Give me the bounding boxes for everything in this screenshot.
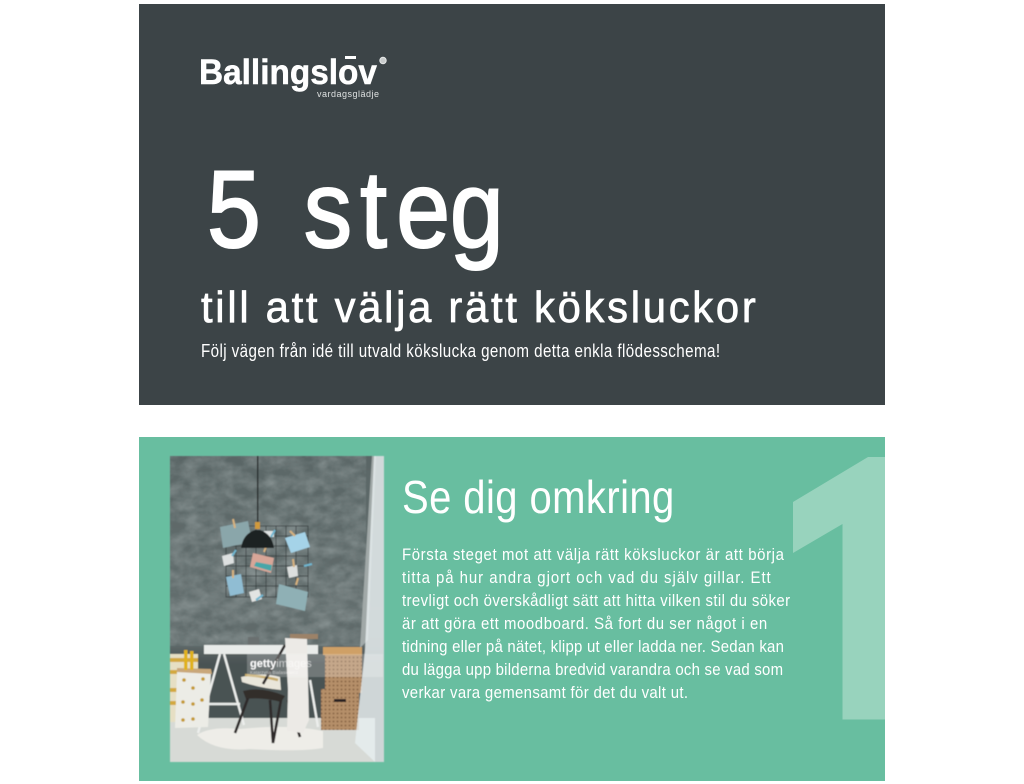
storage bags [170, 650, 212, 728]
watermark band [247, 654, 383, 677]
panel: step 1 [139, 437, 885, 781]
body text [402, 546, 791, 702]
body text: titta på hur andra gjort och vad du själv gillar. Ett [402, 568, 771, 587]
throw blanket [285, 638, 309, 733]
body text: trevligt och överskådligt sätt att hitta vilken stil du söker [402, 591, 791, 610]
watermark band: gettyimages [250, 658, 312, 670]
body text: du lägga upp bilderna bredvid varandra och se vad som [402, 661, 783, 679]
curtain [355, 456, 384, 762]
intro text: Följ vägen från idé till utvald kökslucka genom detta enkla flödesschema! [201, 341, 720, 361]
body text: tidning eller på nätet, klipp ut eller ladda ner. Sedan kan [402, 637, 784, 656]
logo: Ballingslöv: vardagsglädje [317, 89, 379, 99]
boxes [321, 647, 362, 730]
large number 1 [793, 457, 885, 720]
desk with camera [198, 634, 318, 733]
watermark band: Katarzyna Bialasiewicz [250, 670, 299, 675]
chair [235, 645, 300, 743]
body text: Första steget mot att välja rätt köksluckor är att börja [402, 546, 784, 564]
rug [197, 727, 323, 750]
body text: är att göra ett moodboard. Så fort du ser något i en [402, 614, 767, 633]
subtitle: till att välja rätt köksluckor [201, 283, 756, 332]
photo: moodboard interior [170, 456, 384, 762]
body text: verkar vara gemensamt för det du valt ut. [402, 684, 688, 702]
logo: Ballingslöv: Ballingslöv [199, 53, 377, 92]
pendant lamp [241, 456, 274, 548]
pinned photos [220, 519, 312, 611]
title: 5 steg: 5 steg [207, 147, 504, 270]
floor [170, 718, 375, 762]
heading: Se dig omkring: Se dig omkring [402, 472, 674, 524]
header panel [139, 4, 885, 405]
moodboard grid [226, 526, 308, 597]
